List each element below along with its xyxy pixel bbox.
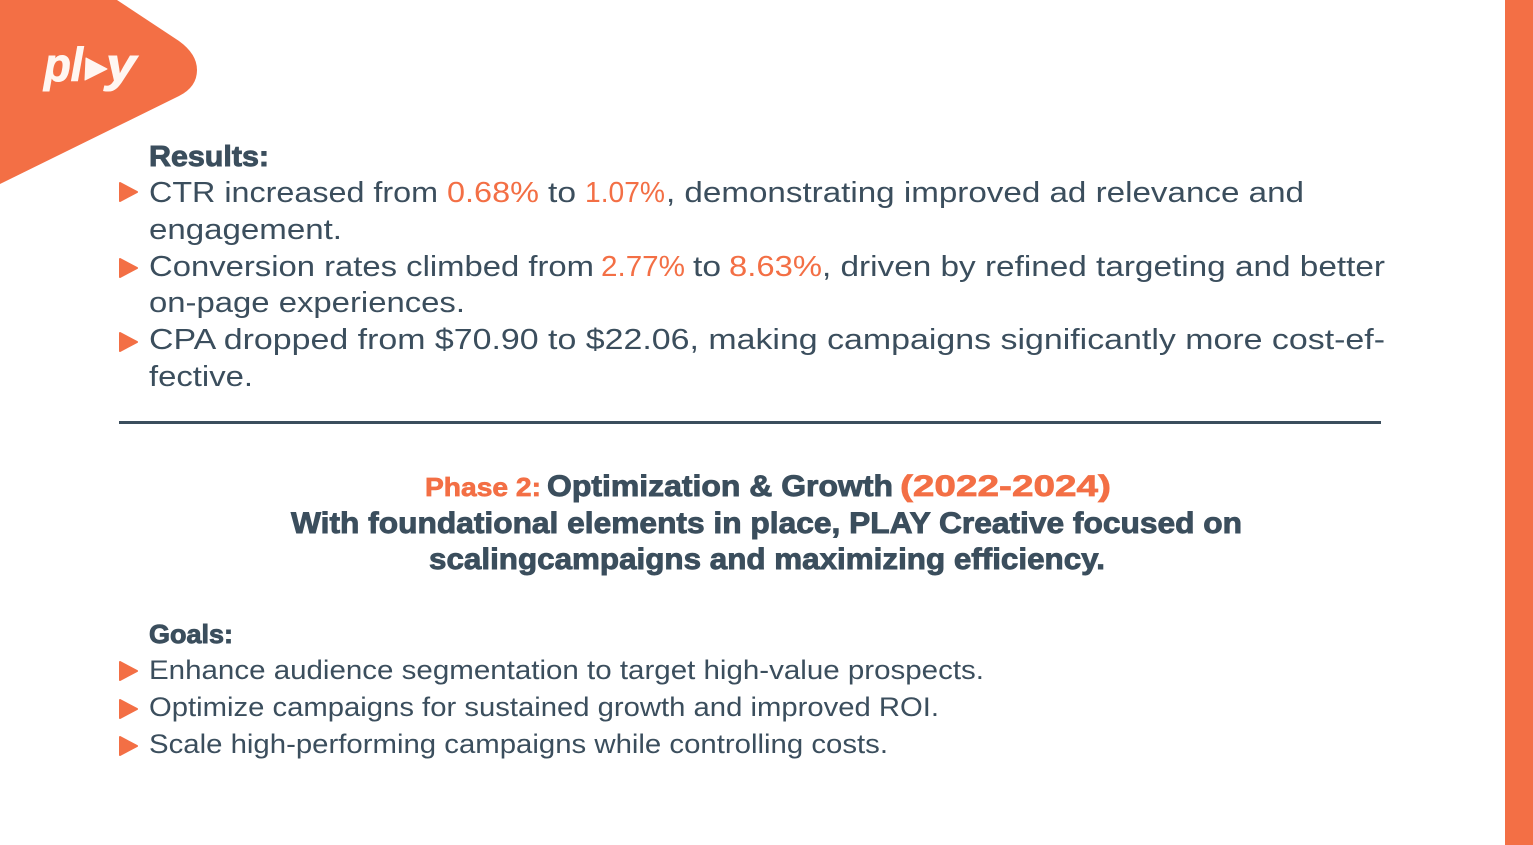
logo badge: [0, 0, 197, 184]
results bullet 2: , driven by refined targeting and better: [822, 251, 1385, 283]
phase 2 heading: Optimization & Growth: [547, 470, 893, 503]
phase 2 heading: Phase 2:: [425, 472, 541, 502]
results heading: Results:: [149, 141, 269, 173]
results bullet 1: engagement.: [149, 214, 342, 246]
results bullet 1: , demonstrating improved ad relevance and: [666, 177, 1304, 209]
results bullet 2: Conversion rates climbed from: [149, 251, 594, 283]
goals bullet 2: Optimize campaigns for sustained growth and improved ROI.: [149, 692, 939, 722]
results bullet 2: 8.63%: [729, 251, 822, 283]
phase 2 heading: [291, 470, 1242, 576]
phase 2 heading: (2022-2024): [900, 470, 1111, 503]
results bullet 2: to: [693, 251, 721, 283]
results bullet 2: on-page experiences.: [149, 287, 465, 319]
results bullet 3: CPA dropped from $70.90 to $22.06, making campaigns significantly more cost-ef-: [149, 324, 1385, 356]
right accent bar: [1505, 0, 1533, 845]
results bullet 1: to: [548, 177, 576, 209]
logo wordmark: y: [104, 38, 139, 91]
results bullet 3: [120, 324, 1385, 393]
phase 2 heading: With foundational elements in place, PLAY Creative focused on: [291, 507, 1242, 540]
results bullet 2: [120, 251, 1385, 319]
results bullet 3: fective.: [149, 361, 253, 393]
results bullet 1: 1.07%: [585, 177, 665, 209]
logo wordmark: [42, 38, 139, 91]
goals section: [120, 619, 984, 759]
section divider: [119, 421, 1381, 424]
logo wordmark: pl: [42, 38, 84, 91]
results bullet 1: CTR increased from: [149, 177, 438, 209]
goals bullet 3: Scale high-performing campaigns while controlling costs.: [149, 729, 888, 759]
phase 2 heading: scalingcampaigns and maximizing efficiency.: [429, 543, 1105, 576]
results bullet 1: [120, 177, 1304, 246]
goals bullet 1: Enhance audience segmentation to target high-value prospects.: [149, 655, 984, 685]
goals heading: Goals:: [149, 619, 233, 649]
results bullet 2: 2.77%: [601, 251, 685, 283]
results section: [120, 141, 1385, 393]
results bullet 1: 0.68%: [447, 177, 539, 209]
